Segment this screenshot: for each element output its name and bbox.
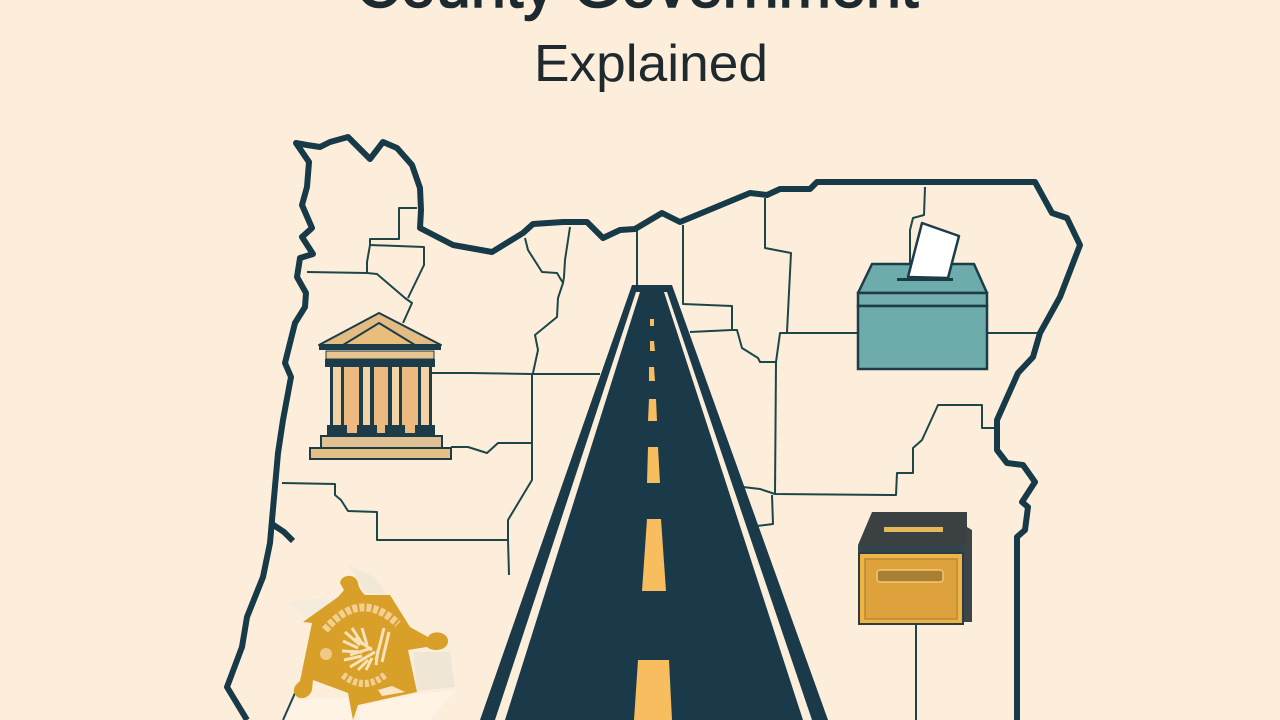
top [858,512,967,545]
icon: courthouse [310,313,451,459]
right road edge line [664,292,812,720]
subtitle: Explained [534,35,768,93]
front [859,553,963,624]
badge paper patches [285,565,455,720]
entablature [319,345,441,350]
county boundary lines [282,187,1040,720]
icon: ballot box [858,223,987,369]
lid band [858,293,987,306]
badge star [294,576,448,720]
pediment [319,313,441,345]
road surface [480,285,828,720]
front slot [877,570,943,582]
side shadow [960,527,972,622]
slot [897,278,953,281]
icon: mailbox [858,512,972,624]
box body [858,306,987,369]
state outline [227,137,1080,720]
columns and walls [331,367,431,433]
center dashes [634,319,672,720]
top slot [884,527,943,532]
left road edge line [495,292,640,720]
road [480,285,828,720]
badge inner emblem [320,607,405,696]
ballot paper [908,223,959,278]
icon: sheriff badge [285,565,455,720]
box lid [858,264,987,293]
steps [327,433,435,436]
